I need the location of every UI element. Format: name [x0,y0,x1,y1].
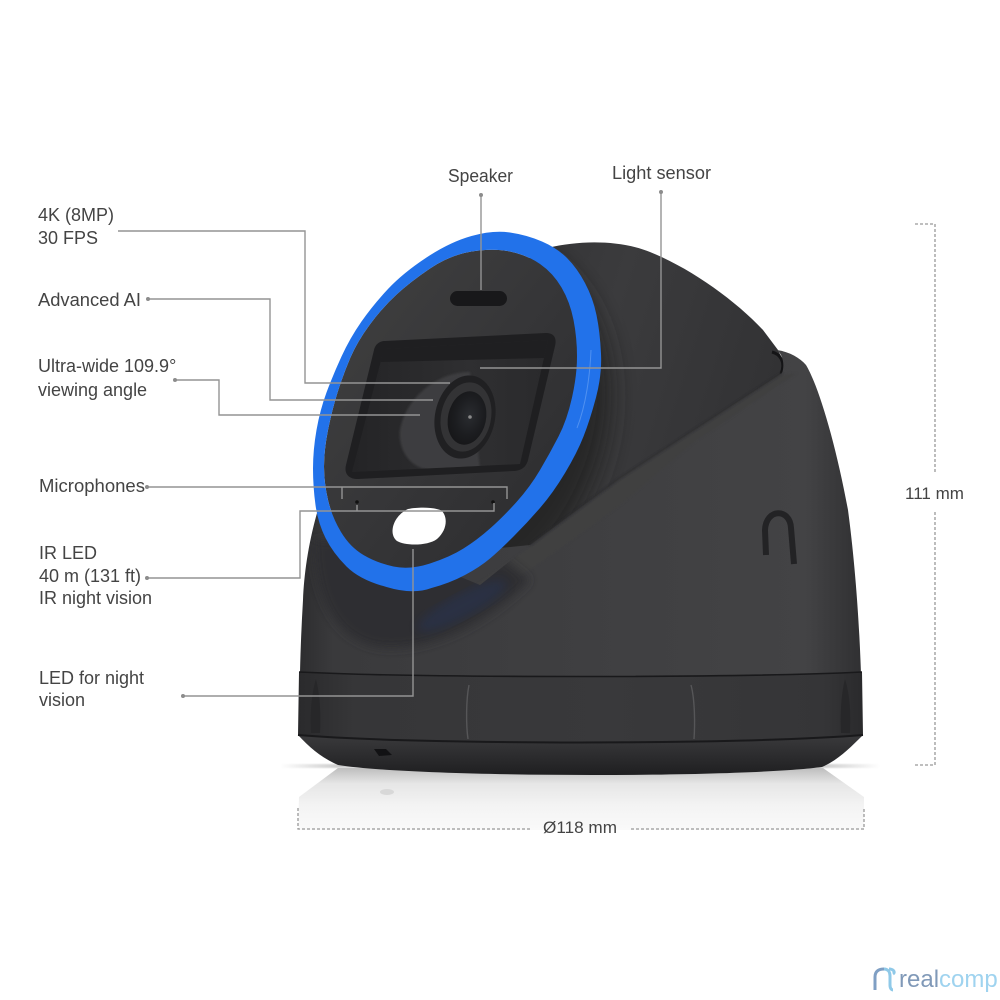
advanced AI leader [148,299,433,400]
diameter dimension [298,808,864,837]
label: light sensor: Light sensor [612,163,711,183]
ghost of power port [380,789,394,795]
label: IR LED: 40 m (131 ft) [39,566,141,586]
blue tint under ring [420,581,504,631]
label: LED for night vision: vision [39,690,85,710]
microphones leader [147,487,507,499]
lens window [346,333,556,479]
bowl shadow under ring [314,540,530,648]
collar body [300,350,862,735]
camera illustration [244,192,880,830]
label: advanced AI: Advanced AI [38,290,141,310]
blue ring [313,232,601,591]
logo icon [875,969,894,990]
dome highlight and ring shadow [502,300,618,548]
realcomp logo [875,966,998,993]
rim edge line [530,373,782,545]
label: IR LED: IR night vision [39,588,152,608]
base foot [298,735,863,775]
band seams [298,672,863,742]
dome rim gap [772,352,783,374]
ultra-wide leader [175,380,420,415]
top strip [380,338,550,362]
dome [400,242,790,610]
label: ultra-wide viewing angle: Ultra-wide 109.9° [38,356,176,376]
ring highlight [577,350,591,428]
height dimension [905,224,964,765]
lighter lens bowl [400,372,480,470]
camera face [324,250,577,568]
collar rim strip [470,373,797,605]
logo wordmark: realcomp [899,966,998,993]
IR LED leader [147,503,494,578]
night LED [393,508,446,545]
label: IR LED: IR LED [39,543,97,563]
band notches [311,679,850,733]
label: 4K 30 FPS: 30 FPS [38,228,98,248]
power port [374,749,392,756]
floor shadow [280,764,880,768]
band [298,672,863,742]
lens [427,370,503,464]
leader lines [118,192,661,696]
night LED leader [183,549,413,696]
logo mark on body [765,513,794,564]
label: LED for night vision: LED for night [39,668,144,688]
label: microphones: Microphones [39,476,145,496]
label: 4K 30 FPS: 4K (8MP) [38,205,114,225]
floor reflection [298,768,864,830]
speaker slot [450,291,507,306]
speaker leader [480,195,482,290]
diameter label: Ø118 mm [543,818,617,837]
leader dots [145,190,663,698]
light sensor leader [480,192,661,368]
mic holes [355,500,359,504]
4K leader [118,231,450,383]
label: ultra-wide viewing angle: viewing angle [38,380,147,400]
height label: 111 mm [905,484,964,503]
label: speaker: Speaker [448,166,513,186]
